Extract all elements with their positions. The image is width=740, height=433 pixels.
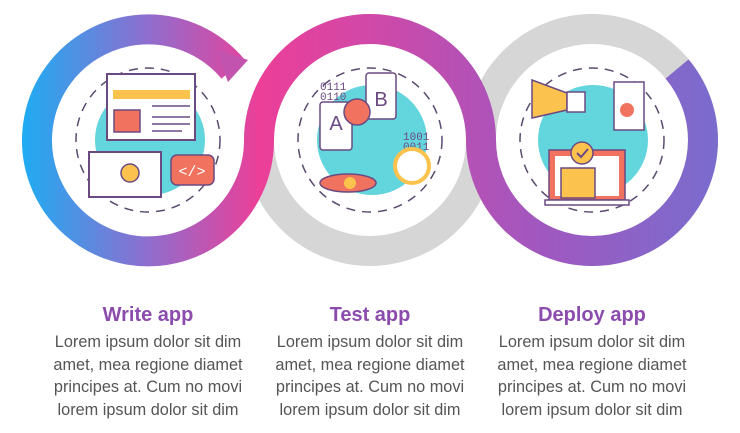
icon 2: test app bbox=[298, 68, 442, 212]
column: test app bbox=[275, 304, 465, 419]
icon 1: write app bbox=[76, 68, 220, 212]
arrowhead bbox=[218, 50, 248, 82]
text: test app bbox=[275, 333, 465, 419]
icon 3: deploy app bbox=[520, 68, 664, 212]
icon 2: test app: 0110 bbox=[320, 92, 346, 104]
diagram: three linked rings with icons bbox=[22, 14, 718, 266]
text: deploy app: Lorem ipsum dolor sit dim bbox=[499, 333, 685, 351]
icon 2: test app: A bbox=[329, 113, 343, 135]
colored flowing ribbon bbox=[37, 29, 703, 251]
icon 2: test app: B bbox=[374, 89, 388, 111]
icon 1: write app: </> bbox=[178, 164, 206, 181]
text: test app: lorem ipsum dolor sit dim bbox=[280, 401, 460, 419]
icon 2: test app: 0111 bbox=[320, 82, 347, 94]
text: deploy app: amet, mea regione diamet bbox=[497, 356, 687, 374]
heading: write app: Write app bbox=[103, 304, 193, 326]
icon 2: test app: 0011 bbox=[403, 142, 430, 154]
text: deploy app bbox=[497, 333, 687, 419]
text: write app: lorem ipsum dolor sit dim bbox=[58, 401, 238, 419]
text: deploy app: principes at. Cum no movi bbox=[498, 378, 686, 396]
heading: test app: Test app bbox=[330, 304, 410, 326]
column: write app bbox=[53, 304, 243, 419]
gray rings bbox=[259, 29, 703, 251]
text: write app: Lorem ipsum dolor sit dim bbox=[55, 333, 241, 351]
text: write app: principes at. Cum no movi bbox=[54, 378, 242, 396]
icon 2: test app: 1001 bbox=[403, 132, 430, 144]
text: deploy app: lorem ipsum dolor sit dim bbox=[502, 401, 682, 419]
column: deploy app bbox=[497, 304, 687, 419]
text: write app bbox=[53, 333, 243, 419]
heading: deploy app: Deploy app bbox=[538, 304, 646, 326]
text: test app: Lorem ipsum dolor sit dim bbox=[277, 333, 463, 351]
text: write app: amet, mea regione diamet bbox=[53, 356, 243, 374]
text: test app: amet, mea regione diamet bbox=[275, 356, 465, 374]
text: test app: principes at. Cum no movi bbox=[276, 378, 464, 396]
